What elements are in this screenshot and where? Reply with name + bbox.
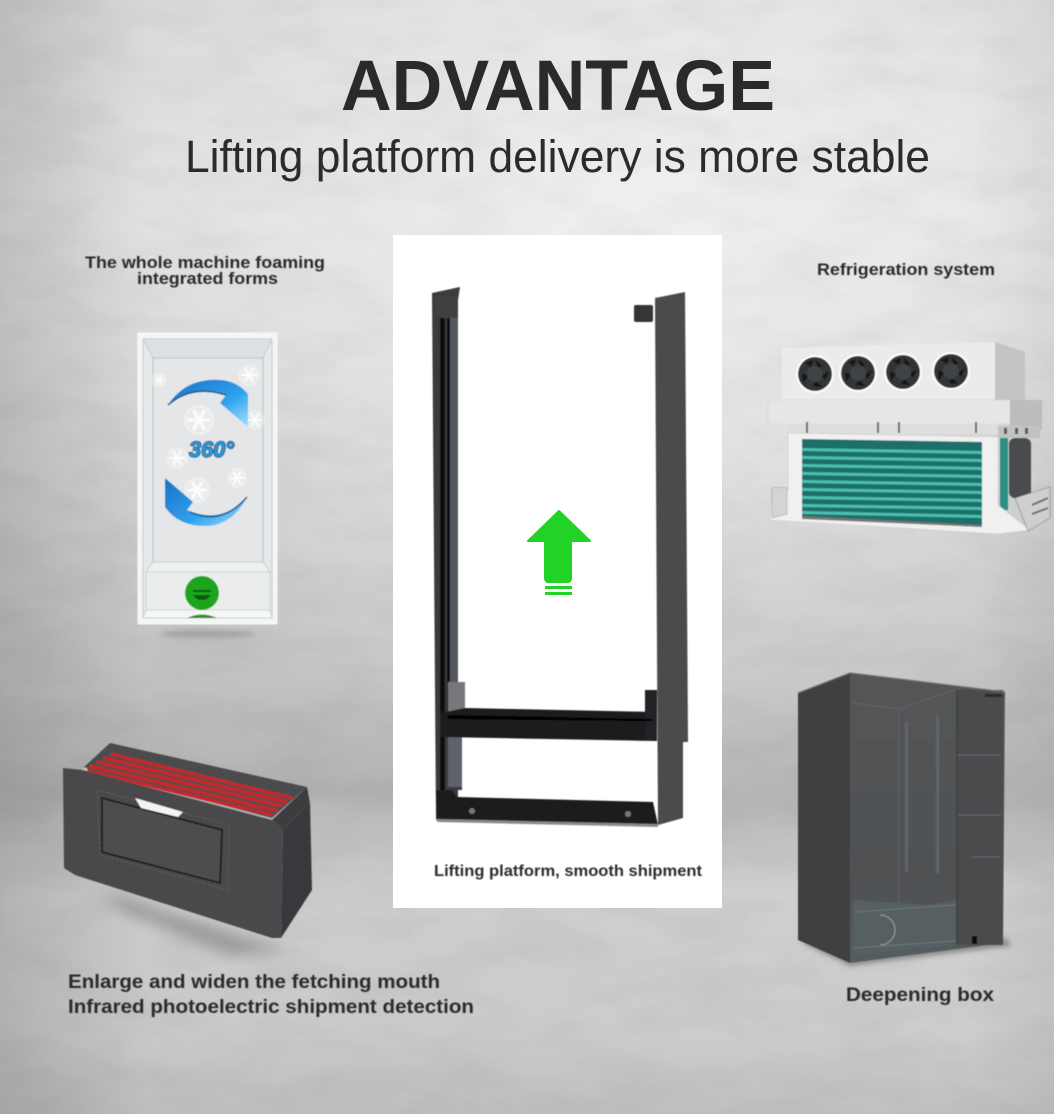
deepening box caption: Deepening box	[846, 985, 994, 1006]
subtitle: Lifting platform delivery is more stable	[185, 131, 930, 182]
lower platform tray	[436, 790, 658, 827]
panel: lifting platform	[393, 235, 722, 908]
panel: fetching mouth	[63, 743, 312, 955]
right panel	[655, 292, 688, 825]
icon: green up arrow	[528, 511, 590, 595]
white panel background	[393, 235, 722, 908]
cabinet shell	[138, 333, 277, 624]
white tab	[135, 798, 183, 817]
360 degree label: 360°	[189, 437, 234, 462]
floor shadow	[160, 630, 256, 638]
fans	[796, 352, 970, 393]
left rail	[432, 287, 465, 820]
side face	[281, 803, 312, 938]
mouth caption: Enlarge and widen the fetching mouth	[68, 972, 440, 993]
mouth caption: Infrared photoelectric shipment detection	[68, 997, 474, 1018]
floor shadow	[100, 890, 290, 955]
icon: lower rotation arrow	[165, 478, 247, 526]
title: ADVANTAGE	[341, 47, 775, 126]
icon: upper rotation arrow	[168, 380, 248, 427]
green coil	[802, 439, 982, 527]
upper fan housing	[782, 342, 1025, 400]
panel: foamed cabinet	[138, 333, 277, 638]
foaming caption	[85, 253, 325, 288]
upper platform beam	[440, 690, 657, 741]
lower coil frame	[770, 433, 1030, 534]
motor block	[634, 305, 653, 322]
top edge	[798, 673, 1005, 693]
brackets	[772, 487, 1050, 531]
side compressor	[1000, 438, 1031, 510]
refrigeration caption: Refrigeration system	[817, 260, 995, 279]
mouth caption	[68, 972, 474, 1018]
inner opening	[82, 743, 307, 818]
icon: green button	[185, 576, 219, 618]
floor shadow	[800, 938, 1012, 966]
platform caption: Lifting platform, smooth shipment	[434, 863, 702, 880]
left side wall	[798, 673, 850, 963]
front face	[63, 768, 283, 938]
panel: deepening box	[798, 673, 1012, 966]
middle tray	[768, 400, 1042, 438]
side compartment	[957, 690, 1003, 945]
lifting frame	[432, 287, 688, 827]
snowflakes	[152, 365, 264, 502]
foaming caption: integrated forms	[137, 269, 278, 288]
pickup door	[97, 790, 229, 890]
panel: refrigeration unit	[768, 342, 1050, 534]
top rim	[272, 787, 310, 830]
foaming caption: The whole machine foaming	[85, 253, 325, 272]
interior front	[850, 673, 1005, 963]
